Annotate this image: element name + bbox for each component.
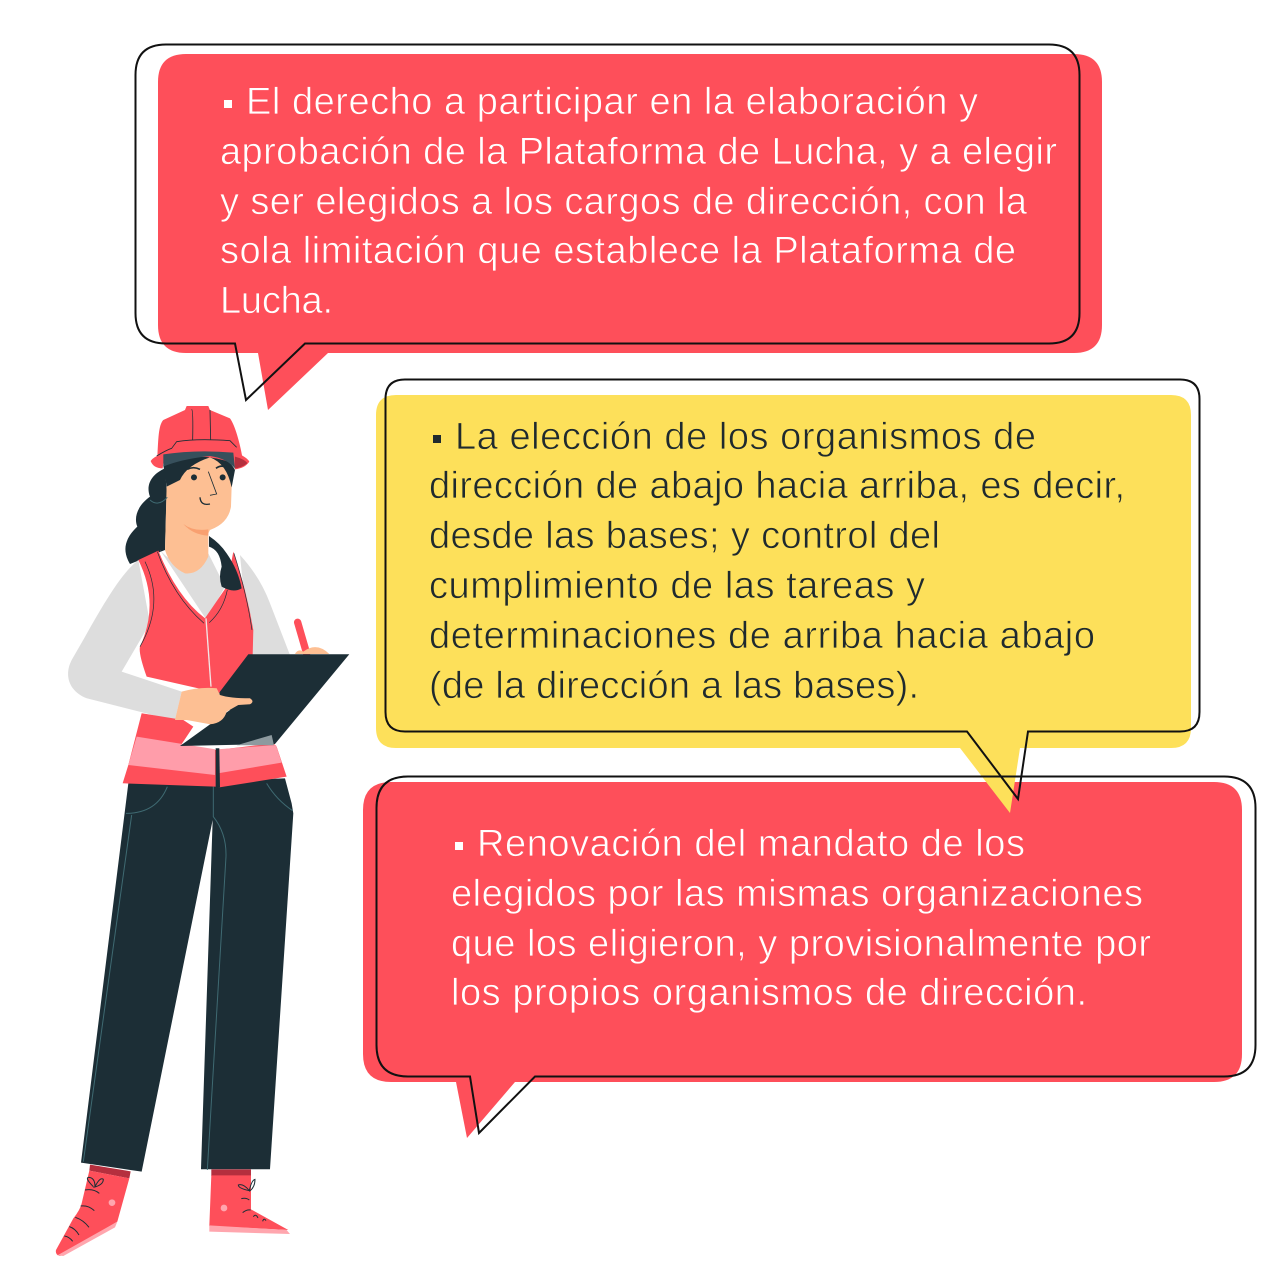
text block: bottom bubble: que los eligieron, y provisionalmente por bbox=[451, 923, 1151, 965]
shirt bbox=[68, 550, 290, 721]
front hair bbox=[163, 456, 235, 487]
helmet bbox=[151, 406, 249, 469]
pen and fingers bbox=[295, 622, 329, 654]
text block: yellow bubble: desde las bases; y control del bbox=[429, 515, 940, 557]
text block: bottom bubble: Renovación del mandato de los bbox=[477, 823, 1025, 865]
panel: bottom speech bubble outline bbox=[376, 776, 1256, 1133]
boots bbox=[56, 1165, 290, 1256]
panel: bottom red speech bubble fill bbox=[363, 782, 1242, 1138]
text block: top bubble: y ser elegidos a los cargos de dirección, con la bbox=[220, 181, 1028, 223]
text block: top bubble: aprobación de la Plataforma de Lucha, y a elegir bbox=[220, 131, 1057, 173]
text block: yellow bubble: (de la dirección a las bases). bbox=[429, 665, 919, 707]
head details bbox=[150, 406, 249, 504]
text block: top bubble: El derecho a participar en la elaboración y bbox=[246, 81, 978, 123]
face and neck bbox=[165, 457, 232, 573]
back hair bbox=[125, 468, 167, 564]
facial features bbox=[187, 466, 228, 504]
text block: yellow bubble: dirección de abajo hacia arriba, es decir, bbox=[429, 465, 1125, 507]
panel: top red speech bubble bbox=[136, 44, 1102, 410]
clipboard bbox=[180, 654, 349, 746]
text block: bottom bubble: elegidos por las mismas organizaciones bbox=[451, 873, 1143, 915]
text block: bottom bubble bbox=[451, 823, 1151, 1014]
text block: top bubble: sola limitación que establece la Plataforma de bbox=[220, 230, 1016, 272]
text block: yellow bubble: cumplimiento de las tareas y bbox=[429, 565, 925, 607]
text block: bottom bubble: los propios organismos de dirección. bbox=[451, 972, 1087, 1014]
text block: yellow bubble: La elección de los organismos de bbox=[455, 416, 1036, 458]
hair strand over shoulder bbox=[209, 536, 242, 590]
trousers bbox=[81, 778, 293, 1172]
vest bbox=[123, 551, 287, 787]
hair lock line bbox=[150, 497, 167, 503]
hand bbox=[175, 688, 252, 724]
text block: top bubble bbox=[220, 81, 1057, 322]
upper body bbox=[68, 406, 349, 787]
text block: yellow bubble bbox=[429, 416, 1125, 707]
panel: yellow speech bubble bbox=[376, 380, 1200, 813]
text block: yellow bubble: determinaciones de arriba hacia abajo bbox=[429, 615, 1095, 657]
text block: top bubble: Lucha. bbox=[220, 280, 333, 322]
illustration: woman worker with clipboard bbox=[56, 406, 349, 1256]
